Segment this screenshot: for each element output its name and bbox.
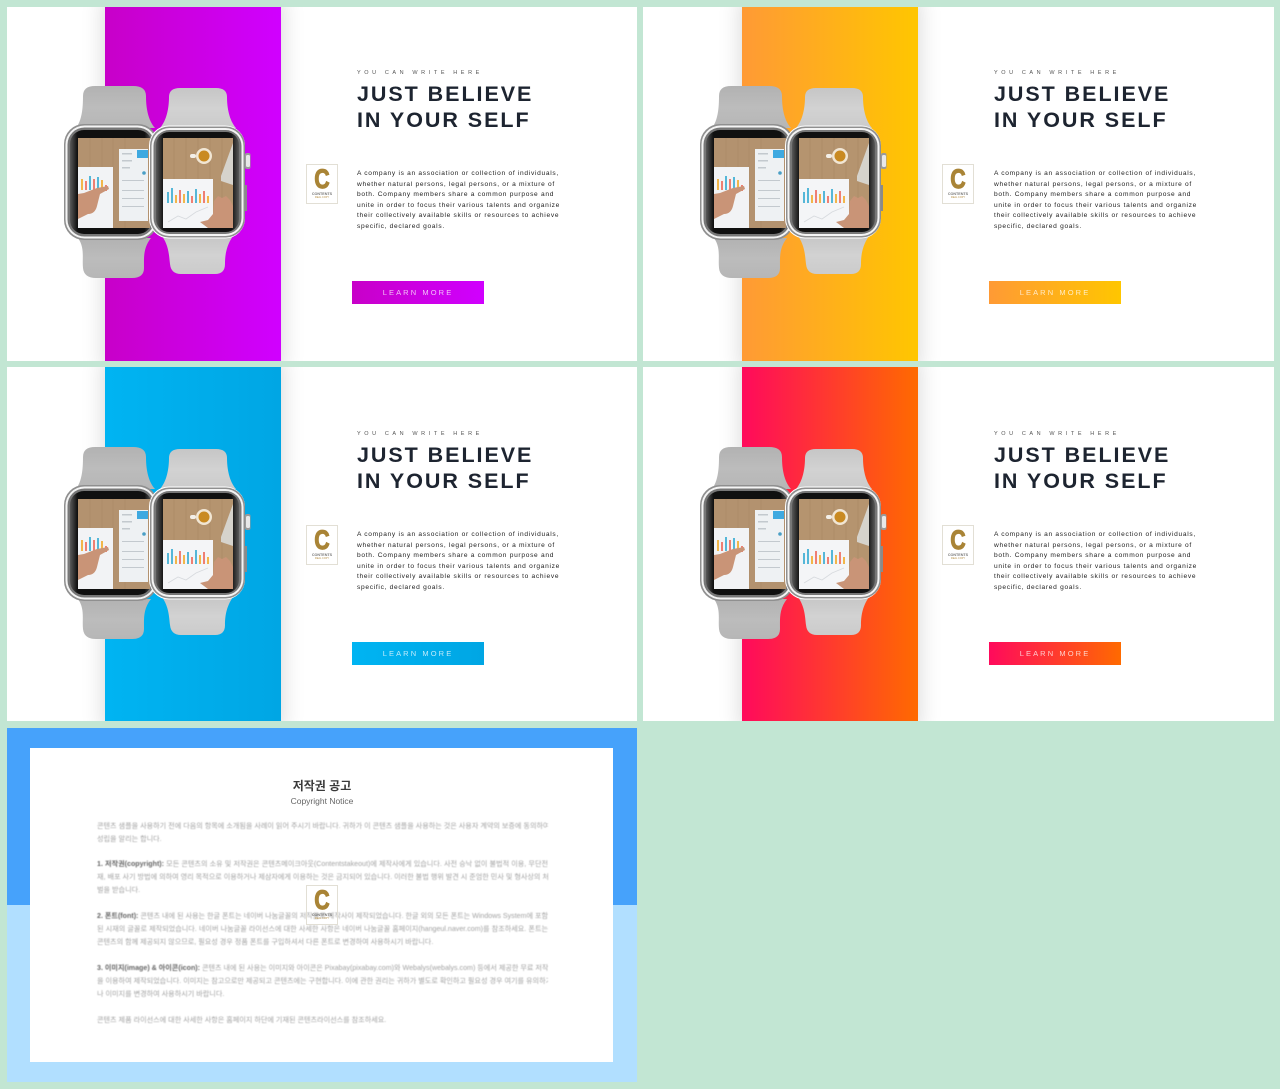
body text: A company is an association or collection of individuals, bbox=[357, 531, 559, 538]
heading bbox=[994, 443, 1170, 493]
body text: specific, declared goals. bbox=[994, 584, 1082, 590]
notice text: 3. 이미지(image) & 아이콘(icon): 콘텐츠 내에 된 사용는 이미지와 아이콘은 Pixabay(pixabay.com)와 Webalys(webalys.com) 등에서 제공한 무료 저작물 bbox=[97, 964, 548, 972]
heading: IN YOUR SELF bbox=[994, 469, 1168, 493]
panel: magenta slide bbox=[7, 7, 637, 361]
logo badge: C bbox=[314, 164, 330, 194]
body text: specific, declared goals. bbox=[994, 222, 1082, 230]
body text: whether natural persons, legal persons, or a mixture of bbox=[357, 542, 555, 548]
image: two smartwatches bbox=[700, 86, 886, 278]
body text: specific, declared goals. bbox=[357, 222, 445, 230]
body text bbox=[994, 170, 1197, 230]
body text bbox=[994, 531, 1197, 590]
button: LEARN MORE bbox=[383, 288, 453, 297]
kicker text: YOU CAN WRITE HERE bbox=[994, 70, 1120, 76]
logo badge bbox=[306, 164, 338, 204]
notice sheet bbox=[30, 748, 613, 1062]
body text: both. Company members share a common purpose and bbox=[357, 191, 554, 198]
body text: A company is an association or collection of individuals, bbox=[357, 170, 559, 177]
panel: pink slide bbox=[643, 367, 1274, 721]
logo badge: CONTENTS bbox=[312, 912, 332, 917]
body text: unite in order to focus their various talents and organize bbox=[994, 562, 1197, 570]
logo badge: CONTENTS bbox=[948, 552, 968, 557]
body text: whether natural persons, legal persons, or a mixture of bbox=[357, 180, 555, 188]
body text: unite in order to focus their various talents and organize bbox=[994, 202, 1197, 208]
body text: both. Company members share a common purpose and bbox=[994, 552, 1191, 559]
logo badge: REAL COPY bbox=[951, 196, 965, 199]
button bbox=[989, 281, 1121, 304]
heading: JUST BELIEVE bbox=[357, 82, 533, 106]
body text: their collectively available skills or resources to achieve bbox=[994, 573, 1196, 580]
body text: both. Company members share a common purpose and bbox=[357, 552, 554, 559]
panel: copyright notice bbox=[7, 728, 637, 1082]
logo badge: C bbox=[950, 164, 966, 194]
panel: orange slide bbox=[643, 7, 1274, 361]
image: two smartwatches bbox=[700, 447, 886, 639]
button: LEARN MORE bbox=[1020, 288, 1090, 297]
logo badge: REAL COPY bbox=[315, 917, 329, 920]
body text: their collectively available skills or resources to achieve bbox=[357, 573, 559, 580]
body text: specific, declared goals. bbox=[357, 584, 445, 590]
body text: both. Company members share a common purpose and bbox=[994, 191, 1191, 198]
logo badge bbox=[306, 885, 338, 925]
heading: JUST BELIEVE bbox=[994, 443, 1170, 467]
body text: A company is an association or collection of individuals, bbox=[994, 531, 1196, 538]
heading bbox=[357, 82, 533, 132]
kicker text: YOU CAN WRITE HERE bbox=[357, 430, 483, 436]
button: LEARN MORE bbox=[1020, 649, 1090, 658]
image: two smartwatches bbox=[64, 86, 250, 278]
heading: IN YOUR SELF bbox=[994, 108, 1168, 132]
notice text: 1. 저작권(copyright): 모든 콘텐츠의 소유 및 저작권은 콘텐츠메이크아웃(Contentstakeout)에 제작사에게 있습니다. 사전 승낙 없이 불법적 이용, 무단전 bbox=[97, 860, 548, 868]
notice subtitle: Copyright Notice bbox=[291, 796, 353, 806]
body text: A company is an association or collection of individuals, bbox=[994, 170, 1196, 177]
logo badge: C bbox=[314, 885, 330, 915]
heading: IN YOUR SELF bbox=[357, 108, 531, 132]
notice text: 재, 배포 사기 방법에 의하여 영리 목적으로 이용하거나 제삼자에게 이용하는 것은 금지되어 있습니다. 이러한 불법 행위 발견 시 준엄한 민사 및 형사상의 처 bbox=[97, 873, 548, 881]
logo badge: CONTENTS bbox=[948, 191, 968, 196]
button: LEARN MORE bbox=[383, 649, 453, 658]
button bbox=[352, 281, 484, 304]
notice text: 나 이미지를 변경하여 사용하시기 바랍니다. bbox=[97, 990, 224, 998]
kicker text: YOU CAN WRITE HERE bbox=[357, 70, 483, 76]
body text: whether natural persons, legal persons, or a mixture of bbox=[994, 180, 1192, 188]
body text: unite in order to focus their various talents and organize bbox=[357, 562, 560, 570]
body text: unite in order to focus their various talents and organize bbox=[357, 202, 560, 208]
image: two smartwatches bbox=[64, 447, 250, 639]
notice text: 콘텐츠의 함께 제공되지 않으므로, 필요성 경우 정품 폰트를 구입하셔서 다른 폰트로 변경하여 사용하시기 바랍니다. bbox=[97, 938, 433, 946]
body text bbox=[357, 531, 560, 590]
logo badge bbox=[306, 525, 338, 565]
body text: their collectively available skills or resources to achieve bbox=[357, 212, 559, 219]
body text: whether natural persons, legal persons, or a mixture of bbox=[994, 542, 1192, 548]
panel: blue slide bbox=[7, 367, 637, 721]
notice text: 콘텐츠 샘플을 사용하기 전에 다음의 항목에 소개됨을 사례이 읽어 주시기 바랍니다. 귀하가 이 콘텐츠 샘플을 사용하는 것은 사용자 계약의 보증에 동의하여 bbox=[97, 822, 548, 830]
kicker text: YOU CAN WRITE HERE bbox=[994, 430, 1120, 436]
heading: JUST BELIEVE bbox=[994, 82, 1170, 106]
body text bbox=[357, 170, 560, 230]
heading: IN YOUR SELF bbox=[357, 469, 531, 493]
notice title: 저작권 공고 bbox=[293, 779, 351, 793]
heading: JUST BELIEVE bbox=[357, 443, 533, 467]
logo badge: CONTENTS bbox=[312, 552, 332, 557]
notice text: 콘텐츠 제품 라이선스에 대한 사세한 사항은 홈페이지 하단에 기재된 콘텐츠라이선스를 참조하세요. bbox=[97, 1016, 386, 1024]
heading bbox=[994, 82, 1170, 132]
logo badge: C bbox=[314, 525, 330, 555]
notice text: 2. 폰트(font): 콘텐츠 내에 된 사용는 한글 폰트는 네이버 나눔글꼴의 저작물로 제작사이 제작되었습니다. 한글 외의 모든 폰트는 Windows System에 포함 bbox=[97, 912, 548, 920]
button bbox=[989, 642, 1121, 665]
body text: their collectively available skills or resources to achieve bbox=[994, 212, 1196, 219]
heading bbox=[357, 443, 533, 493]
logo badge: C bbox=[950, 525, 966, 555]
logo badge: REAL COPY bbox=[315, 557, 329, 560]
button bbox=[352, 642, 484, 665]
logo badge bbox=[942, 164, 974, 204]
notice text: 된 시재의 글꼴로 제작되었습니다. 네이버 나눔글꼴 라이선스에 대한 사세한 사항은 네이버 나눔글꼴 홈페이지(hangeul.naver.com)를 참조하세요. 폰트는 bbox=[97, 925, 548, 933]
logo badge: REAL COPY bbox=[951, 557, 965, 560]
notice text: 성립을 알리는 합니다. bbox=[97, 835, 162, 843]
notice text: 을 이용하여 제작되었습니다. 이미지는 참고으로만 제공되고 콘텐츠에는 구현합니다. 이에 관한 권리는 귀하가 별도로 확인하고 필요성 경우 여기를 유의하거 bbox=[97, 977, 548, 985]
logo badge: CONTENTS bbox=[312, 191, 332, 196]
notice text bbox=[96, 822, 548, 1024]
logo badge bbox=[942, 525, 974, 565]
notice text: 벌을 받습니다. bbox=[97, 886, 140, 894]
logo badge: REAL COPY bbox=[315, 196, 329, 199]
